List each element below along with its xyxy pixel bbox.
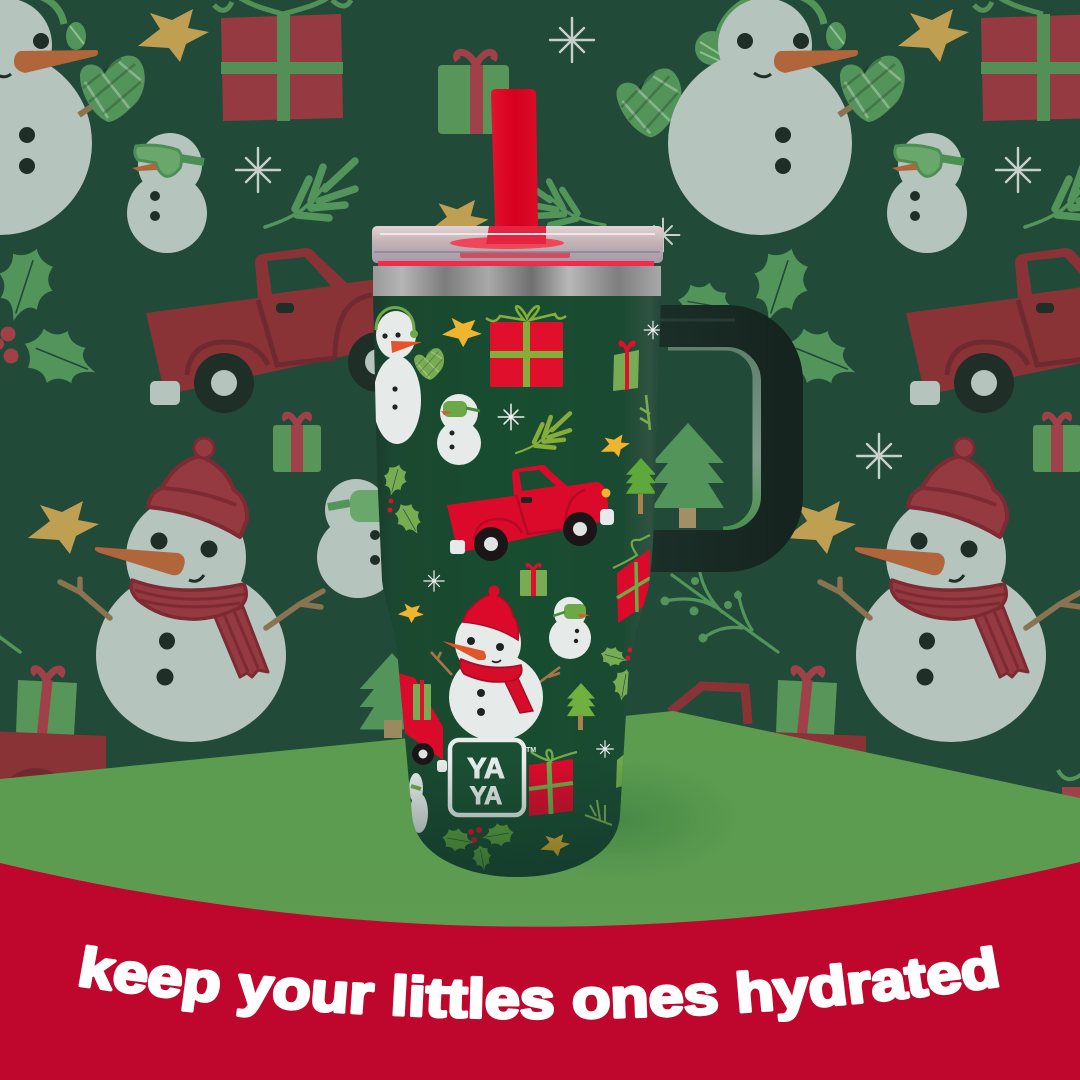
print: holly right bbox=[600, 647, 632, 700]
red truck bed bottom bbox=[0, 728, 106, 800]
print: holly bottom bbox=[442, 823, 514, 870]
body print artwork bbox=[373, 306, 662, 872]
print: YAYA logo: YA bbox=[467, 753, 505, 785]
print: beanie snowman bbox=[431, 586, 560, 741]
tree inside handle bbox=[652, 423, 724, 528]
red truck bed bottom bbox=[680, 728, 866, 800]
sprig bbox=[1025, 161, 1080, 227]
print: goggle snowman right bbox=[549, 597, 591, 659]
sparkle bbox=[236, 148, 280, 192]
print: small gift bbox=[613, 342, 639, 391]
straw bbox=[491, 89, 538, 226]
print: small tree bbox=[626, 458, 656, 514]
gift green bottom bbox=[16, 669, 77, 735]
print: YAYA logo: YA bbox=[470, 782, 502, 810]
print: star 2 bbox=[600, 434, 630, 457]
print: sparkle bbox=[498, 404, 524, 430]
big snowman with earmuffs bbox=[668, 0, 858, 235]
sprig with berries under handle bbox=[660, 573, 778, 652]
holly and berries bbox=[0, 240, 106, 398]
truck cab outline bottom right bbox=[670, 686, 748, 724]
print: YAYA logo bbox=[450, 740, 536, 815]
sprig stub bbox=[0, 630, 20, 652]
star behind lid bbox=[428, 200, 489, 245]
big snowman with earmuffs bbox=[0, 0, 98, 235]
gift green middle bbox=[1033, 415, 1080, 472]
small snowman with goggles bbox=[127, 133, 207, 253]
snowman with goggles, partly hidden bbox=[317, 479, 399, 598]
sparkle: top center bbox=[550, 18, 594, 62]
snowman with beanie and scarf bbox=[820, 438, 1080, 742]
tree left of tumbler bbox=[360, 653, 424, 738]
holly behind handle bbox=[674, 278, 742, 332]
background pattern: repeat tile 2 bbox=[668, 0, 1080, 807]
print: YAYA logo: TM bbox=[526, 747, 536, 754]
sprig behind straw bbox=[521, 169, 605, 236]
background pattern: repeat tile 1 bbox=[0, 0, 418, 807]
snowman with beanie and scarf bbox=[60, 438, 323, 742]
print: small tree lower bbox=[567, 683, 595, 730]
red footer band bbox=[0, 862, 1080, 1080]
print: goggle snowman bbox=[437, 394, 481, 465]
print: star lower bbox=[398, 604, 424, 623]
body base shading bbox=[373, 296, 661, 877]
print: small gift edge bbox=[616, 754, 624, 788]
star middle bbox=[785, 501, 856, 554]
tumbler bbox=[372, 89, 782, 877]
sparkle near lid bbox=[646, 218, 680, 252]
print: small gift center bbox=[520, 564, 547, 596]
curl and red box low bbox=[298, 770, 362, 807]
print: twig bottom bbox=[585, 800, 612, 825]
print: red gift with bow bbox=[486, 306, 566, 387]
print: sparkle bottom bbox=[597, 741, 613, 757]
red gasket bbox=[378, 261, 654, 266]
print: star bottom bbox=[540, 834, 570, 856]
gift: green top center bbox=[438, 52, 509, 134]
sparkle bbox=[996, 148, 1040, 192]
sparkle only on right bbox=[857, 434, 901, 478]
print: holly top left bbox=[384, 464, 421, 534]
print: small snowman bottom left bbox=[409, 773, 428, 833]
tumbler shadow on hill bbox=[500, 760, 740, 880]
star middle bbox=[28, 501, 99, 554]
holly and berries bbox=[742, 240, 866, 398]
gift green middle bbox=[273, 415, 321, 472]
print: star bbox=[442, 318, 482, 348]
steel rim bbox=[373, 266, 661, 299]
mitten: left of big snowman bbox=[614, 66, 697, 141]
small snowman with goggles bbox=[887, 133, 967, 253]
headline: keep your littles ones hydrated: keep your littles ones hydrated bbox=[78, 944, 1000, 1022]
background pattern: center items bbox=[317, 18, 778, 738]
red pickup truck bbox=[146, 248, 418, 413]
print: partial truck with gift bbox=[398, 673, 447, 772]
print: mitten bbox=[414, 348, 444, 380]
tumbler body bbox=[373, 296, 661, 877]
curl and red box low bbox=[1058, 770, 1080, 807]
red pickup truck bbox=[906, 248, 1080, 413]
mitten right bbox=[839, 56, 905, 122]
gift red top bbox=[214, 0, 351, 121]
gift green bottom bbox=[776, 669, 837, 735]
print: sparkle lower bbox=[424, 571, 444, 591]
handle bbox=[650, 320, 782, 551]
print: red pickup truck bbox=[447, 465, 614, 561]
print: sprig edge bbox=[640, 395, 650, 430]
star top bbox=[898, 9, 969, 62]
mitten right bbox=[79, 56, 145, 122]
print: skewed red gift bbox=[613, 535, 650, 623]
sprig bbox=[265, 161, 355, 227]
print: sprig bbox=[516, 413, 570, 453]
gift red top bbox=[974, 0, 1080, 121]
lid bbox=[372, 226, 663, 263]
green hill surface bbox=[0, 711, 1080, 1080]
print: red gift lower bbox=[529, 750, 577, 816]
print: sparkle edge bbox=[644, 321, 662, 339]
print: earmuff snowman bbox=[373, 308, 422, 444]
star top bbox=[138, 9, 209, 62]
